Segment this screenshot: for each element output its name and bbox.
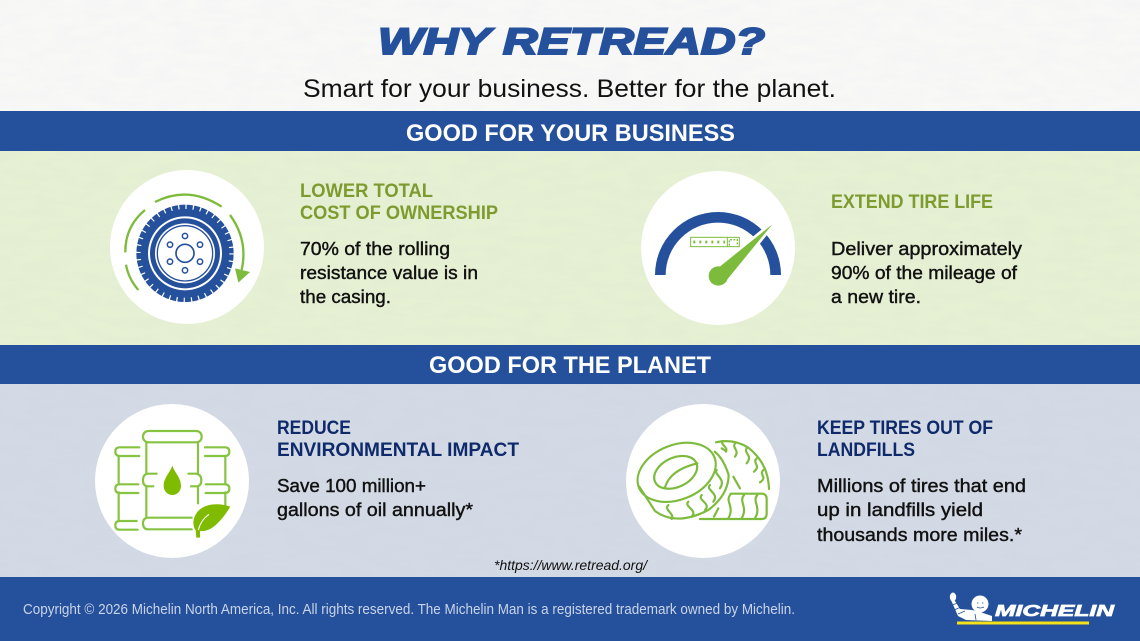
text: landfills: thousands more miles.* [817, 525, 1022, 545]
heading: reduce environmental impact: ENVIRONMENTAL IMPACT [277, 439, 519, 461]
text: landfills: up in landfills yield [817, 500, 983, 520]
heading: extend tire life: EXTEND TIRE LIFE [831, 191, 993, 213]
icon: speedometer gauge [641, 171, 795, 325]
panel background: good for the planet [0, 384, 1140, 577]
panel background: good for your business [0, 151, 1140, 345]
text: rolling resistance: the casing. [300, 287, 391, 307]
text: mileage [831, 239, 1022, 307]
heading: lower total cost of ownership: COST OF OWNERSHIP [300, 202, 498, 224]
icon: pile of tires [626, 404, 780, 558]
heading: lower total cost of ownership [300, 180, 498, 224]
Michelin logo [950, 592, 1115, 624]
heading: lower total cost of ownership: LOWER TOTAL [300, 180, 433, 202]
text: landfills: Millions of tires that end [817, 476, 1026, 496]
text: rolling resistance [300, 239, 478, 307]
heading: keep tires out of landfills: LANDFILLS [817, 439, 915, 461]
section band: good for the planet [0, 345, 1140, 384]
copyright: Copyright © 2026 Michelin North America, Inc. All rights reserved. The Michelin Man is a registered trademark owned by Michelin. [23, 602, 795, 618]
subtitle: Smart for your business. Better for the planet. [303, 75, 836, 103]
text: save oil [277, 476, 473, 520]
footer bar [0, 577, 1140, 641]
section band: good for your business: GOOD FOR YOUR BUSINESS [406, 120, 735, 147]
section band: good for the planet: GOOD FOR THE PLANET [429, 352, 711, 379]
heading: keep tires out of landfills: KEEP TIRES OUT OF [817, 417, 993, 439]
heading: reduce environmental impact: REDUCE [277, 417, 351, 439]
icon: tire with rotation arrows [110, 170, 264, 324]
title: WHY RETREAD? [378, 21, 765, 62]
text: rolling resistance: resistance value is in [300, 263, 478, 283]
text: landfills [817, 476, 1026, 545]
heading: reduce environmental impact [277, 417, 519, 461]
text: mileage: 90% of the mileage of [831, 263, 1018, 283]
header background [0, 0, 1140, 111]
icon: oil barrels with leaf [95, 404, 249, 558]
section band: good for your business [0, 111, 1140, 151]
text: mileage: Deliver approximately [831, 239, 1022, 259]
text: mileage: a new tire. [831, 287, 921, 307]
text: save oil: gallons of oil annually* [277, 500, 473, 520]
heading: keep tires out of landfills [817, 417, 993, 461]
text: save oil: Save 100 million+ [277, 476, 426, 496]
source note: *https://www.retread.org/ [494, 557, 649, 573]
text: rolling resistance: 70% of the rolling [300, 239, 450, 259]
wordmark: MICHELIN [995, 603, 1115, 620]
